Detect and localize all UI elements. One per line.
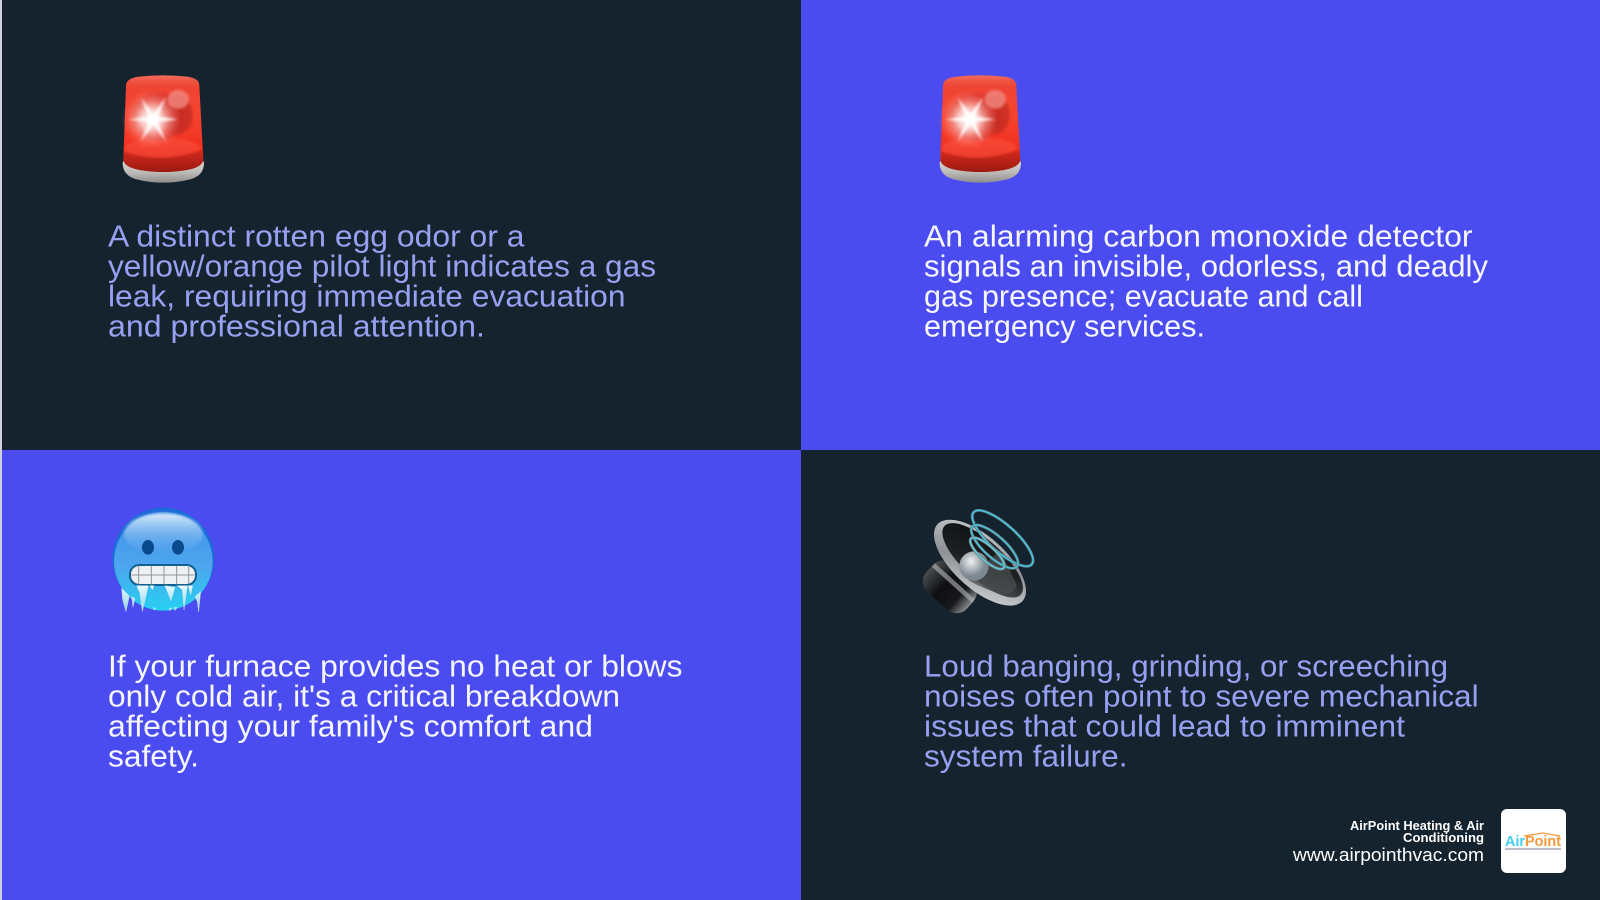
text: carbon monoxide detector: signals an invisible, odorless, and deadly (924, 248, 1488, 284)
text: banging and grinding (924, 648, 1479, 774)
text: rotten egg odor: yellow/orange pilot light indicates a gas (108, 248, 656, 284)
panel: carbon monoxide (801, 0, 1600, 450)
text: no heat or cold air: affecting your family's comfort and (108, 708, 593, 744)
text: rotten egg odor: leak, requiring immediate evacuation (108, 278, 626, 314)
logo (1501, 809, 1566, 873)
text: no heat or cold air: only cold air, it's a critical breakdown (108, 678, 620, 714)
icon: red siren (939, 75, 1021, 183)
text: rotten egg odor: A distinct rotten egg odor or a (108, 218, 525, 254)
company name: Conditioning (1403, 830, 1484, 845)
icon: speaker (917, 502, 1041, 620)
panel: gas leak (0, 0, 801, 450)
company name: AirPoint Heating & Air (1350, 818, 1484, 833)
text: banging and grinding: issues that could lead to imminent (924, 708, 1405, 744)
icon: red siren (122, 75, 204, 183)
logo: AirPoint (1505, 833, 1561, 850)
panel: loud noises (801, 450, 1600, 900)
text: rotten egg odor: and professional attention. (108, 308, 485, 344)
company name (1350, 818, 1484, 845)
icon: freezing face (112, 508, 214, 612)
text: no heat or cold air: safety. (108, 738, 199, 774)
website: www.airpointhvac.com (1292, 845, 1484, 865)
text: banging and grinding: system failure. (924, 738, 1128, 774)
text: carbon monoxide detector: emergency services. (924, 308, 1205, 344)
panel: no heat (0, 450, 801, 900)
text: carbon monoxide detector: An alarming carbon monoxide detector (924, 218, 1472, 254)
text: carbon monoxide detector: gas presence; evacuate and call (924, 278, 1363, 314)
text: no heat or cold air: If your furnace provides no heat or blows (108, 648, 682, 684)
text: carbon monoxide detector (924, 218, 1488, 344)
text: banging and grinding: Loud banging, grinding, or screeching (924, 648, 1448, 684)
text: rotten egg odor (108, 218, 656, 344)
text: no heat or cold air (108, 648, 682, 774)
footer: company branding (1292, 809, 1566, 873)
text: banging and grinding: noises often point to severe mechanical (924, 678, 1479, 714)
